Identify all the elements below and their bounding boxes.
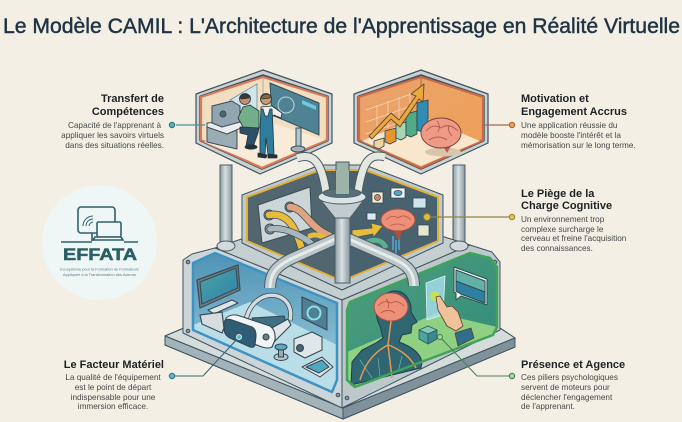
icon: joystick xyxy=(274,344,288,360)
panel: cognitive load (right, brain and icons) xyxy=(352,188,429,254)
panel: presence and agency (green) xyxy=(347,253,497,387)
icon: brain xyxy=(381,209,415,241)
person with nervous system xyxy=(351,291,422,385)
lower left pipe xyxy=(270,236,342,288)
text block: presence and agency: servent de moteurs pour xyxy=(521,383,610,392)
pipes of tangled cables xyxy=(269,207,332,250)
top right module: motivation xyxy=(354,70,488,174)
lower block frame xyxy=(183,205,500,408)
pillar caps xyxy=(217,241,468,251)
connector: skills transfer xyxy=(169,122,205,128)
text block: cognitive load: des connaissances. xyxy=(521,244,593,253)
text block: skills transfer: dans des situations réelles. xyxy=(65,141,164,150)
center column xyxy=(336,162,349,196)
window xyxy=(230,84,257,125)
icon: translucent gesture window xyxy=(426,276,445,320)
text block: cognitive load: Un environnement trop xyxy=(521,215,605,224)
lower center pipe xyxy=(335,215,350,283)
icon: monitor and laptop xyxy=(61,207,138,242)
upper left pipe xyxy=(297,157,326,192)
text block: skills transfer xyxy=(61,93,164,150)
logo: EFFATA: Appliquée à la Transformation des Acteurs xyxy=(63,273,136,277)
icon: connection plate xyxy=(258,187,312,243)
text block: cognitive load: cerveau et freine l'acquisition xyxy=(521,234,627,243)
wall display xyxy=(270,83,319,152)
text block: presence and agency xyxy=(521,359,625,411)
upper right pipe xyxy=(358,156,385,192)
text block: cognitive load: complexe surcharge le xyxy=(521,225,604,234)
central pipes and funnel xyxy=(270,156,414,288)
text block: motivation: mémorisation sur le long terme. xyxy=(521,141,636,150)
connector: cognitive load xyxy=(424,214,515,220)
desk and computer xyxy=(207,101,248,149)
top left module: skills transfer xyxy=(196,70,332,174)
icon: pointing hand xyxy=(436,296,474,346)
icon: yellow arrow xyxy=(352,223,383,238)
seated worker xyxy=(238,94,259,149)
pillars supporting the top modules xyxy=(220,165,465,245)
panel: hardware factor (blue) xyxy=(193,253,337,392)
text block: presence and agency: de l'apprenant. xyxy=(521,402,575,411)
text block: hardware factor: La qualité de l'équipement xyxy=(65,373,161,382)
text block: cognitive load: Charge Cognitive xyxy=(521,200,612,212)
icon: floating information cards xyxy=(367,188,429,236)
text block: presence and agency: Ces piliers psychologiques xyxy=(521,373,618,382)
logo: EFFATA: Ecosystème pour la Formation de Formateurs xyxy=(60,268,139,272)
base plate xyxy=(165,300,515,419)
lower right pipe xyxy=(342,236,414,286)
text block: cognitive load xyxy=(521,188,627,253)
connector: motivation xyxy=(482,122,515,128)
logo: EFFATA xyxy=(42,185,157,300)
icon: VR headset xyxy=(224,295,291,348)
connector: hardware factor xyxy=(169,334,242,379)
text block: hardware factor: Le Facteur Matériel xyxy=(64,359,164,371)
text block: motivation: modèle booste l'intérêt et la xyxy=(521,131,621,140)
text block: hardware factor: immersion efficace. xyxy=(78,402,148,411)
text block: skills transfer: appliquer les savoirs virtuels xyxy=(61,131,164,140)
icon: wall screen xyxy=(302,297,327,330)
connector: presence and agency xyxy=(438,334,515,379)
text block: motivation xyxy=(521,93,636,150)
text block: presence and agency: Présence et Agence xyxy=(521,359,625,371)
text block: motivation: Engagement Accrus xyxy=(521,106,627,118)
logo: EFFATA: EFFATA xyxy=(63,246,137,264)
funnel xyxy=(318,197,366,218)
text block: motivation: Une application réussie du xyxy=(521,121,618,130)
text block: hardware factor xyxy=(64,359,164,411)
text block: hardware factor: indispensable pour une xyxy=(71,393,156,402)
icon: projector xyxy=(294,332,322,358)
panel: cognitive load (left mechanism) xyxy=(258,187,332,250)
chart hologram xyxy=(392,236,400,254)
standing worker xyxy=(258,94,282,158)
icon: speech bubble with hand xyxy=(454,267,487,305)
icon: rising arrow xyxy=(369,84,424,139)
text block: presence and agency: déclencher l'engagement xyxy=(521,393,613,402)
text block: skills transfer: Transfert de xyxy=(101,93,164,105)
middle module frame xyxy=(242,165,443,290)
icon: cube xyxy=(419,326,437,344)
text block: skills transfer: Compétences xyxy=(92,106,164,118)
text block: skills transfer: Capacité de l'apprenant à xyxy=(68,121,161,130)
wall grid xyxy=(366,92,417,134)
icon: tablet xyxy=(302,357,333,377)
text block: motivation: Motivation et xyxy=(521,93,589,105)
bar chart xyxy=(374,100,428,149)
yellow frame of middle module xyxy=(247,170,438,281)
text block: cognitive load: Le Piège de la xyxy=(521,188,595,200)
text block: hardware factor: est le point de départ xyxy=(75,383,152,392)
icon: brain xyxy=(421,118,461,156)
title: Le Modèle CAMIL : L'Architecture de l'Apprentissage en Réalité Virtuelle xyxy=(3,15,680,38)
icon: monitor xyxy=(197,265,240,333)
